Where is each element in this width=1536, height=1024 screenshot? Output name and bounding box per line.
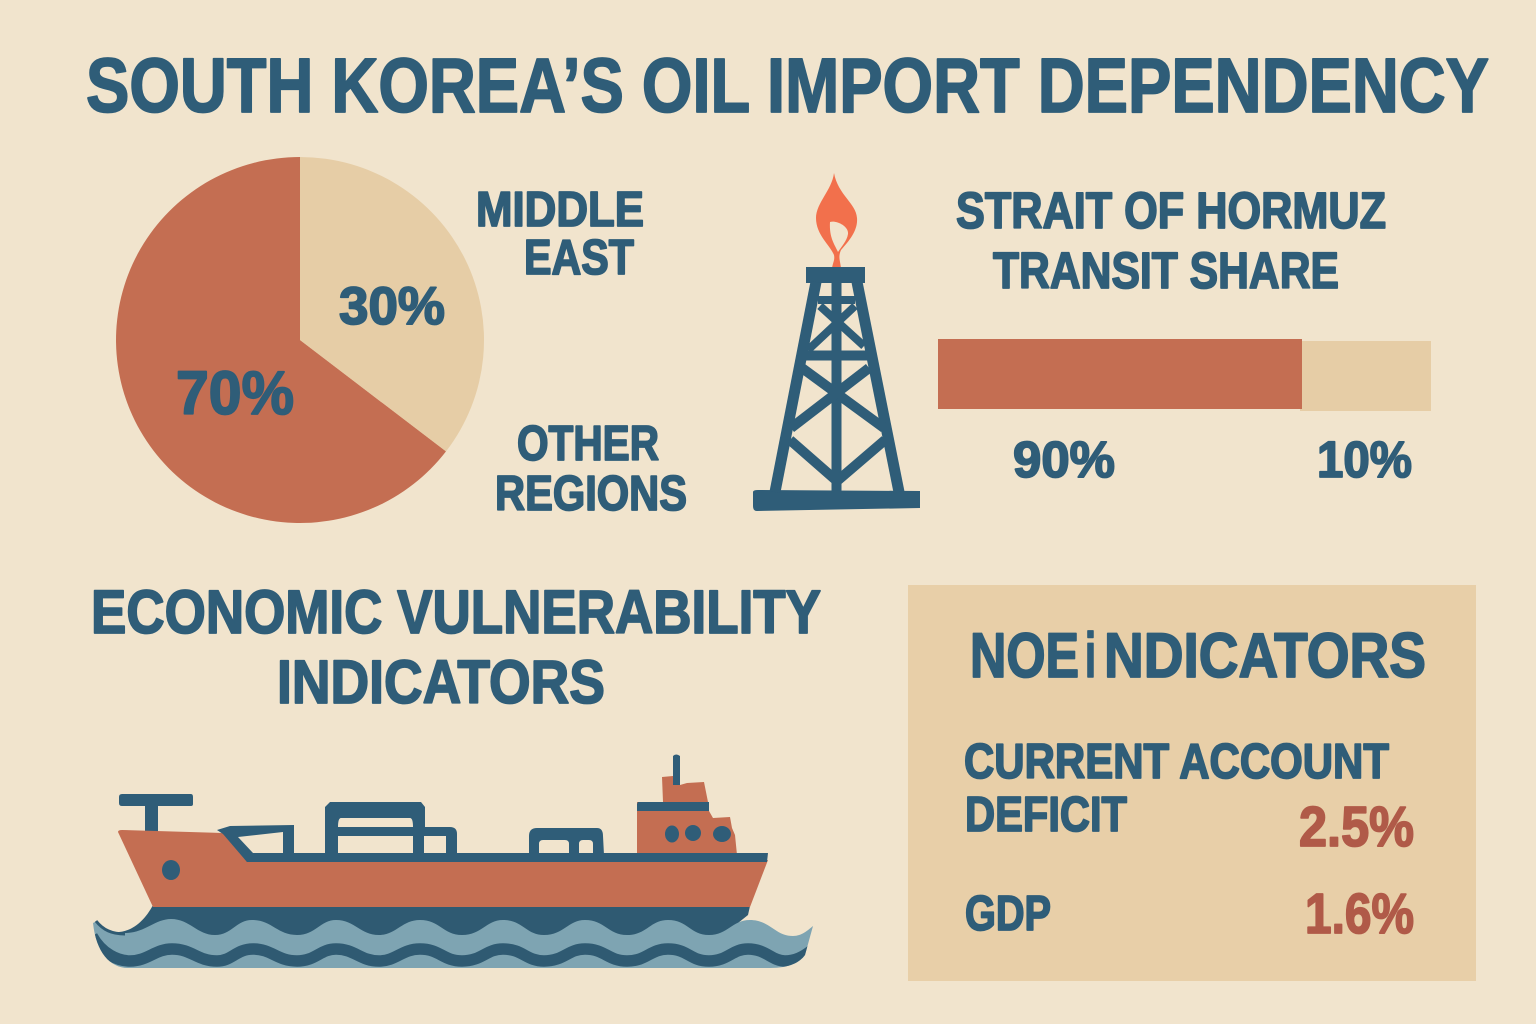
ship aft cargo frame <box>529 828 604 855</box>
heading: economic vulnerability indicators: ECONOMIC VULNERABILITY <box>91 578 821 646</box>
label: Middle East: EAST <box>524 231 634 285</box>
ship portholes <box>162 825 731 880</box>
pie slice: other regions 70% <box>116 157 446 523</box>
panel: Strait of Hormuz transit share <box>938 182 1431 488</box>
panel heading: i <box>1085 621 1096 691</box>
bar value: 10%: 10% <box>1317 431 1412 488</box>
icon: derrick tower <box>753 267 920 511</box>
row label: current account deficit <box>964 735 1389 842</box>
heading: Strait of Hormuz transit share: TRANSIT SHARE <box>993 242 1339 299</box>
row value: 1.6%: 1.6% <box>1305 882 1414 946</box>
ship midship pipe frame <box>325 802 457 855</box>
ship hull <box>118 830 768 907</box>
row label: GDP: GDP <box>965 887 1051 941</box>
bar value: 90%: 90% <box>1013 431 1115 488</box>
panel heading: NOE <box>970 621 1079 691</box>
bar chart: 90/10 split <box>938 339 1431 411</box>
row label: current account deficit: CURRENT ACCOUNT <box>964 735 1389 789</box>
icon: oil derrick with flame <box>753 173 920 511</box>
pie slice: Middle East 30% <box>300 157 484 451</box>
ship funnel band and mast <box>637 754 709 811</box>
label: Middle East: MIDDLE <box>476 183 644 237</box>
pie value: 70%: 70% <box>176 359 294 427</box>
panel background <box>908 585 1476 981</box>
ship fore cabin frame <box>217 825 294 862</box>
icon: oil tanker on waves <box>92 754 813 968</box>
water <box>93 919 813 968</box>
label: Other Regions: REGIONS <box>495 467 687 521</box>
row value: 2.5%: 2.5% <box>1299 795 1414 859</box>
panel: indicators <box>908 585 1476 981</box>
panel: import sources pie chart <box>116 157 687 523</box>
panel heading: NDICATORS <box>1104 621 1426 691</box>
pie value: 30%: 30% <box>339 277 445 336</box>
panel heading <box>970 621 1426 691</box>
heading: Strait of Hormuz transit share <box>956 182 1386 299</box>
icon: flame <box>816 173 857 268</box>
ship bow mast <box>119 794 193 833</box>
label: Other Regions <box>495 417 687 521</box>
wave top edge at bow <box>96 921 125 934</box>
heading: economic vulnerability indicators: INDICATORS <box>277 648 605 716</box>
label: Other Regions: OTHER <box>517 417 659 471</box>
heading: Strait of Hormuz transit share: STRAIT OF HORMUZ <box>956 182 1386 239</box>
ship deck line <box>240 853 768 862</box>
row label: current account deficit: DEFICIT <box>965 788 1127 842</box>
ship keel <box>112 905 750 938</box>
label: Middle East <box>476 183 644 285</box>
ship funnel and bridge tower <box>637 776 737 855</box>
wave band <box>92 936 812 961</box>
heading: economic vulnerability indicators <box>91 578 821 716</box>
